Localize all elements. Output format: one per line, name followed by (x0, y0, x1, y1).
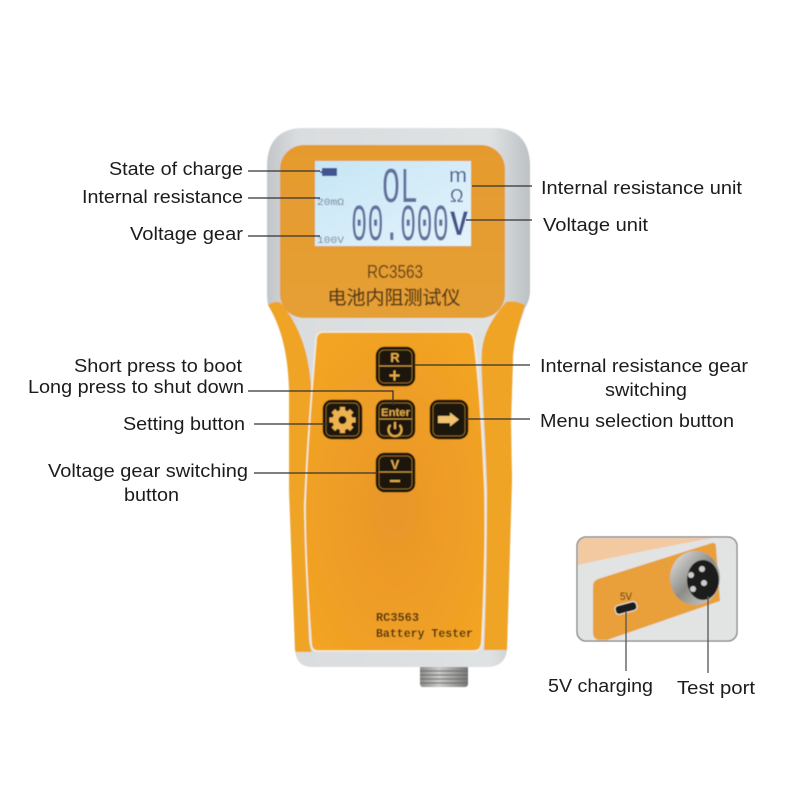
inset photo of ports (577, 537, 737, 641)
button: arrow (430, 400, 468, 438)
inset background (577, 537, 737, 641)
tester device (267, 128, 530, 687)
label: internal resistance gear switching: Internal resistance gear (540, 355, 748, 376)
grey device casing (267, 128, 530, 667)
button: settings gear (324, 400, 362, 438)
ohm unit symbol: Ω (450, 186, 463, 206)
voltage reading: 00.000 (351, 197, 449, 256)
range label 100V: 100V (317, 236, 344, 247)
button: R plus (376, 348, 414, 386)
label: internal resistance unit: Internal resistance unit (541, 177, 742, 198)
label: voltage gear switching button (48, 460, 248, 505)
round test connector (670, 551, 720, 605)
button: R plus: R (390, 350, 400, 365)
label: internal resistance: Internal resistance (82, 186, 243, 207)
resistance reading: OL (382, 161, 418, 218)
button: Enter power (376, 400, 414, 438)
label: internal resistance gear switching: switching (605, 379, 687, 400)
right yellow grip (482, 301, 525, 650)
micro USB port (614, 591, 638, 615)
orange port panel (593, 543, 720, 640)
button: Enter power: Enter (381, 407, 411, 419)
label: boot and shutdown: Long press to shut down (28, 376, 244, 397)
test port connector (420, 664, 468, 687)
left yellow grip (268, 302, 312, 652)
button: V minus (376, 454, 414, 492)
model label on keypad panel: RC3563 (376, 611, 419, 625)
label: state of charge: State of charge (109, 158, 243, 179)
button: V minus: V (391, 457, 400, 472)
leader lines (248, 171, 708, 673)
label: menu selection button: Menu selection button (540, 410, 734, 431)
Chinese product name: 电池内阻测试仪 (327, 287, 461, 309)
label: voltage gear: Voltage gear (130, 223, 243, 244)
model number on display panel: RC3563 (367, 262, 423, 282)
label: 5V charging: 5V charging (548, 675, 653, 696)
LCD screen (315, 161, 471, 256)
label: boot and shutdown (28, 355, 244, 397)
label: voltage unit: Voltage unit (543, 214, 648, 235)
label: test port: Test port (677, 677, 755, 698)
volt unit symbol: V (450, 205, 468, 243)
product label on keypad panel: Battery Tester (376, 627, 473, 641)
label: internal resistance gear switching (540, 355, 748, 400)
upper orange display panel (280, 145, 505, 318)
label: voltage gear switching button: button (124, 484, 179, 505)
peach casing strip (578, 538, 712, 565)
range label 20 milliohm: 20mΩ (317, 198, 344, 209)
micro USB port: 5V (620, 591, 633, 603)
label: voltage gear switching button: Voltage gear switching (48, 460, 248, 481)
milli unit symbol: m (449, 165, 467, 187)
battery icon (320, 168, 337, 176)
label: setting button: Setting button (123, 413, 245, 434)
label: boot and shutdown: Short press to boot (74, 355, 242, 376)
lower yellow keypad panel (305, 332, 485, 651)
